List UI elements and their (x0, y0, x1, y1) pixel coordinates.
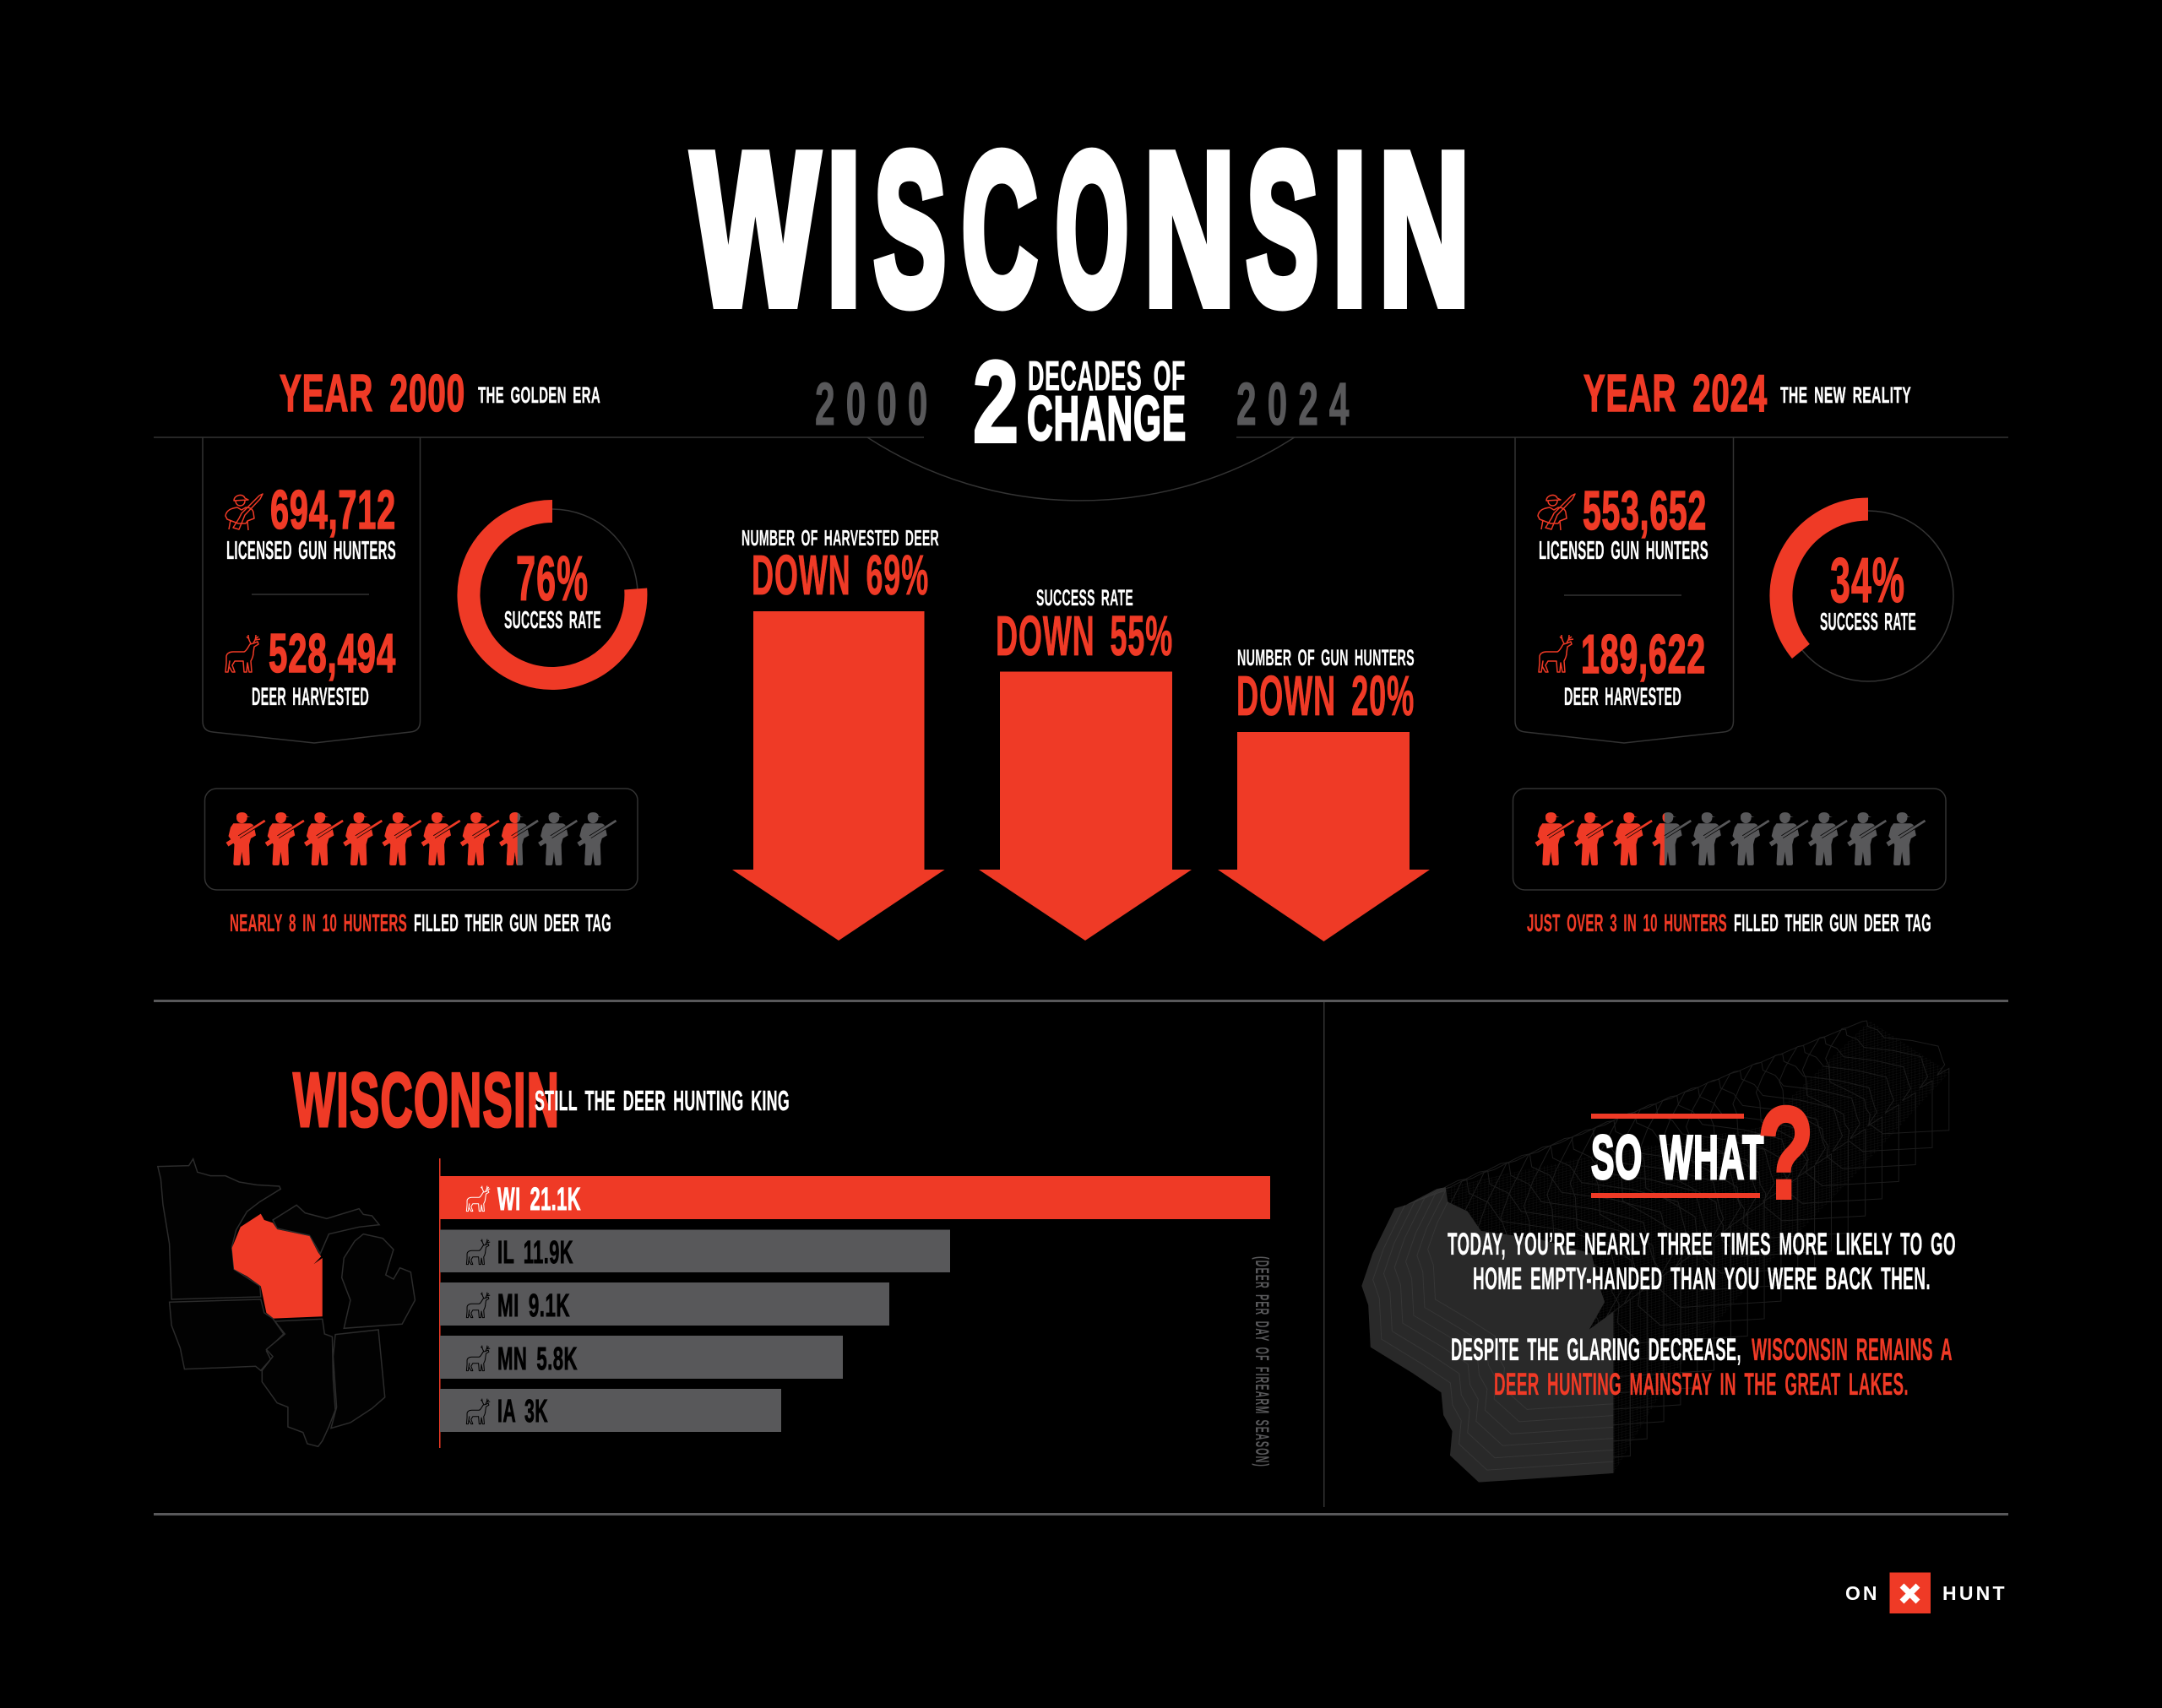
icon: hunter outline (1538, 494, 1575, 530)
bar: WI: WI 21.1K (497, 1182, 581, 1217)
caption: nearly 8 in 10: NEARLY 8 IN 10 HUNTERS (230, 910, 407, 937)
panel: down arrows (732, 525, 1430, 941)
logo: onX hunt (1845, 1572, 2005, 1613)
change: CHANGE (1027, 383, 1187, 453)
label: success rate: SUCCESS RATE (1036, 585, 1133, 610)
panel: year 2000: LICENSED GUN HUNTERS (226, 535, 396, 565)
heading: so what: SO WHAT (1591, 1124, 1764, 1192)
stats pocket outline (203, 437, 421, 743)
title: N (1144, 109, 1235, 349)
stat: licensed hunters 2024: 553,652 (1583, 480, 1707, 541)
bar chart: deer per day (439, 1158, 1270, 1448)
bar: IL: IL 11.9K (497, 1235, 573, 1271)
icon: deer outline (1539, 635, 1573, 672)
panel: year 2024: LICENSED GUN HUNTERS (1539, 535, 1708, 565)
panel: year 2024: SUCCESS RATE (1820, 609, 1916, 636)
decades of: DECADES OF (1028, 354, 1186, 399)
stat: down 69 percent: DOWN 69% (752, 544, 929, 607)
pictogram panel: 3 in 10 hunters (1513, 789, 1946, 890)
donut chart: 34 percent (1781, 509, 1953, 681)
label: number of gun hunters: NUMBER OF GUN HUNTERS (1237, 645, 1415, 670)
panel: year 2024 (1513, 365, 1953, 937)
panel: so what (1361, 1020, 1955, 1483)
stat: 34 percent: 34% (1830, 545, 1905, 615)
title: W (693, 109, 818, 349)
title: I (1333, 109, 1366, 349)
lower michigan (342, 1234, 415, 1328)
icon: hunter outline (225, 494, 263, 530)
upper michigan (273, 1205, 379, 1254)
subheading: still the deer hunting king: STILL THE DEER HUNTING KING (535, 1085, 790, 1116)
stat: licensed hunters 2000: 694,712 (270, 479, 396, 540)
year label 2024: 2024 (1236, 371, 1350, 438)
stat: deer harvested 2024: 189,622 (1581, 623, 1706, 685)
wisconsin highlighted (232, 1214, 323, 1319)
solid wisconsin silhouette (1361, 1187, 1613, 1483)
subheading: the new reality: THE NEW REALITY (1780, 382, 1911, 408)
bar: WI (440, 1176, 1270, 1219)
bar: MN: MN 5.8K (497, 1342, 578, 1377)
panel: year 2000: SUCCESS RATE (504, 607, 601, 634)
subheading: the golden era: THE GOLDEN ERA (478, 382, 600, 408)
icon: deer outline (225, 635, 260, 672)
logo mark (1890, 1572, 1931, 1613)
panel: year 2000 (203, 365, 638, 937)
heading: 2 decades of change (815, 338, 1350, 467)
title: O (1056, 109, 1128, 349)
title: S (1247, 109, 1318, 349)
arrow: down 20 percent (1218, 732, 1430, 941)
minnesota (158, 1159, 280, 1299)
heading: year 2024: YEAR 2024 (1583, 365, 1768, 423)
text block: great lakes mainstay (1451, 1332, 1953, 1402)
text: (DEER PER DAY OF FIREARM SEASON) (1252, 1256, 1273, 1467)
map: great lakes states (158, 1159, 415, 1446)
indiana (331, 1330, 385, 1429)
arrow: down 55 percent (979, 672, 1192, 941)
caption: just over 3 in 10: JUST OVER 3 IN 10 HUNTERS (1527, 910, 1727, 937)
logo: onX hunt: HUNT (1942, 1582, 2005, 1604)
panel: deer hunting king (158, 1058, 1273, 1467)
label: number of harvested deer: NUMBER OF HARVESTED DEER (741, 525, 939, 550)
text block: great lakes mainstay: DESPITE THE GLARING DECREASE, (1451, 1332, 1741, 1367)
stat: down 55 percent: DOWN 55% (996, 605, 1173, 668)
illinois (262, 1319, 335, 1446)
stat: down 20 percent: DOWN 20% (1236, 664, 1415, 728)
heading rule bottom (1591, 1193, 1760, 1198)
title: C (962, 109, 1037, 349)
pictogram panel: 8 in 10 hunters (204, 789, 638, 890)
bar: MI (440, 1282, 889, 1326)
panel: year 2000: DEER HARVESTED (252, 683, 369, 711)
title: S (874, 109, 946, 349)
stat: 76 percent: 76% (516, 543, 589, 614)
bar: MN (440, 1336, 843, 1379)
text block: three times (1448, 1227, 1956, 1296)
background: extruded wisconsin mesh (1361, 1020, 1949, 1483)
bar: IA: IA 3K (497, 1394, 548, 1429)
caption: just over 3 in 10: FILLED THEIR GUN DEER TAG (1734, 910, 1931, 937)
iowa (170, 1299, 284, 1370)
heading rule top (1591, 1114, 1744, 1119)
title: I (827, 109, 861, 349)
year label 2000: 2000 (815, 371, 928, 438)
caption: nearly 8 in 10: FILLED THEIR GUN DEER TAG (414, 910, 611, 937)
heading: wisconsin: WISCONSIN (293, 1058, 560, 1143)
bar: IL (440, 1229, 950, 1272)
stat: deer harvested 2000: 528,494 (269, 622, 396, 684)
title: N (1379, 109, 1469, 349)
donut chart: 76 percent (467, 509, 638, 680)
bar: MI: MI 9.1K (497, 1288, 570, 1324)
big numeral 2: 2 (973, 338, 1020, 467)
header rule with arc (154, 437, 2008, 501)
arrow: down 69 percent (732, 611, 945, 941)
logo: onX hunt: ON (1845, 1582, 1877, 1604)
bar: IA (440, 1389, 781, 1432)
question mark: ? (1757, 1080, 1814, 1226)
heading: year 2000: YEAR 2000 (280, 365, 465, 423)
panel: year 2024: DEER HARVESTED (1564, 683, 1681, 711)
stats pocket outline (1515, 437, 1733, 743)
text block: great lakes mainstay: WISCONSIN REMAINS A (1752, 1332, 1953, 1367)
